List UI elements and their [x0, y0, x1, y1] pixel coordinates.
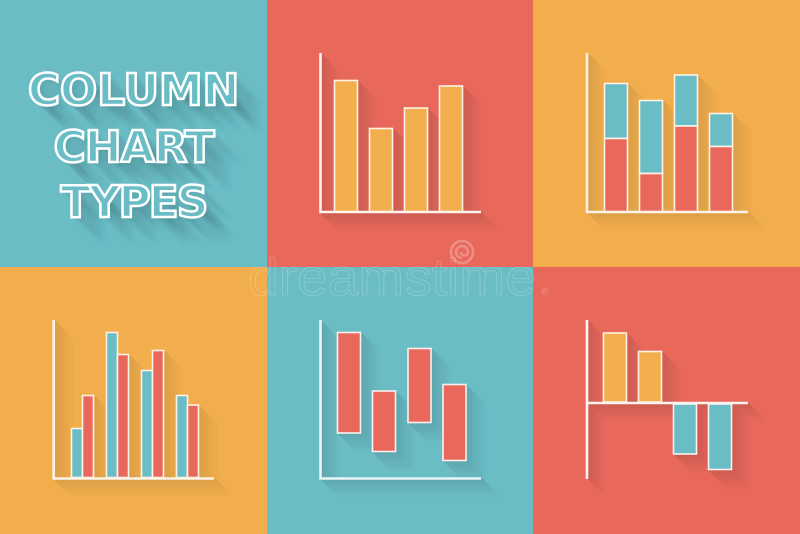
- panel: title background: [0, 0, 267, 267]
- axes: [587, 320, 748, 479]
- axes: [54, 320, 214, 478]
- negative columns: [674, 404, 732, 470]
- axes: [320, 320, 481, 478]
- long shadows: [320, 320, 499, 497]
- columns: [334, 80, 462, 212]
- watermark swirl: [451, 241, 473, 263]
- watermark registered mark: ®: [541, 287, 549, 298]
- axes: [320, 53, 481, 212]
- panel: clustered column chart: [0, 267, 267, 534]
- panel: stacked column chart: [533, 0, 800, 267]
- long shadows: [320, 53, 499, 231]
- floating columns: [338, 332, 466, 460]
- long shadows: [53, 320, 232, 497]
- clustered columns: [72, 332, 198, 478]
- watermark: [248, 241, 549, 307]
- watermark wordmark: dreamstime: [248, 249, 536, 307]
- positive columns: [604, 333, 662, 402]
- long shadows: [587, 53, 766, 231]
- panel: simple column chart: [267, 0, 533, 267]
- title line: TYPES: TYPES: [61, 177, 206, 228]
- panel: positive and negative column chart: [533, 267, 800, 534]
- title: [28, 65, 256, 237]
- panel: floating column chart: [267, 267, 533, 534]
- title line: COLUMN: COLUMN: [28, 65, 239, 116]
- title line: CHART: CHART: [53, 122, 214, 173]
- stacked columns: [604, 75, 732, 212]
- long shadows: [587, 320, 766, 497]
- axes: [587, 53, 748, 212]
